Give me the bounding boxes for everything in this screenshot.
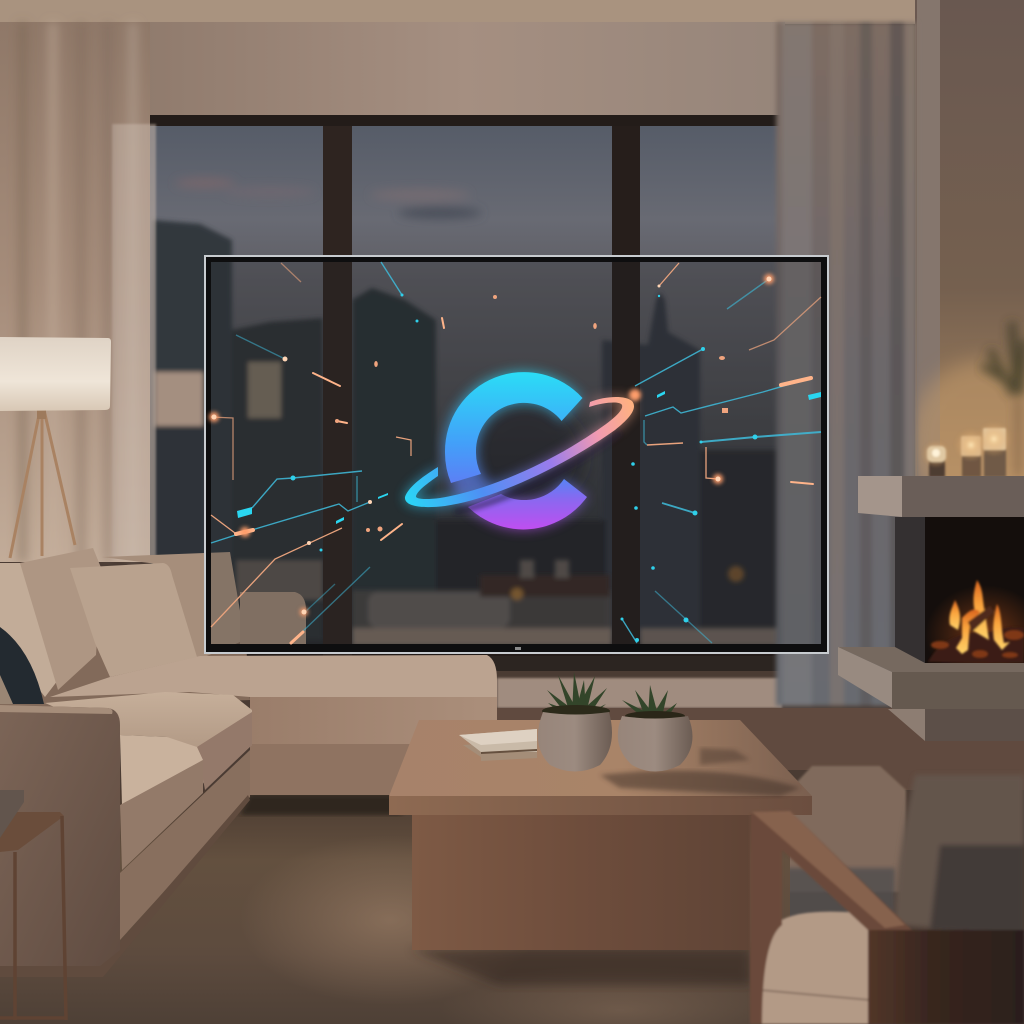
letter C — [445, 372, 582, 483]
coffee table — [389, 720, 812, 950]
plant on mantel — [982, 322, 1024, 476]
books on table — [459, 729, 537, 761]
orbit ring — [405, 397, 634, 507]
candles on mantel — [922, 421, 1012, 477]
cyan circuit lines — [211, 262, 821, 643]
left succulent — [547, 672, 607, 716]
ceiling — [0, 0, 1024, 24]
window reflection of the room — [236, 533, 804, 646]
back cushions — [0, 563, 58, 697]
sectional sofa — [0, 548, 497, 977]
window mullions — [150, 115, 782, 671]
upper seat cushion — [45, 692, 252, 785]
sunset clouds — [175, 178, 482, 219]
throw pillow — [70, 563, 197, 677]
wooden arm — [750, 811, 1024, 1024]
transparent display — [205, 256, 828, 653]
orange circuit lines — [211, 263, 821, 627]
floor: wood and carpet — [0, 708, 1024, 1024]
logo glow — [405, 372, 634, 530]
bezel — [206, 257, 827, 652]
ring shadow — [455, 432, 620, 512]
cyan blocks and dashes — [237, 391, 821, 524]
sofa base — [120, 750, 250, 940]
left pot — [538, 712, 612, 772]
bright orange streaks — [236, 318, 813, 643]
plant pots — [538, 672, 692, 772]
screen tint — [210, 261, 822, 645]
firebox — [895, 517, 1024, 685]
right curtain — [776, 22, 917, 706]
upper wall — [145, 22, 785, 118]
seat cushion — [760, 912, 880, 1024]
chaise top — [50, 655, 497, 697]
particles — [209, 274, 774, 642]
armchair foreground — [750, 775, 1024, 1024]
planet C logo — [405, 372, 634, 530]
right sofa arm seen behind screen — [240, 592, 306, 645]
floor lamp — [0, 337, 111, 558]
fireplace — [838, 322, 1024, 741]
hearth — [838, 647, 1024, 741]
flames — [949, 580, 1010, 654]
window with skyline view — [150, 115, 804, 671]
right wall — [910, 0, 1024, 520]
baseboard under window — [497, 678, 782, 708]
chaise front — [250, 697, 497, 744]
lower seat cushion — [120, 735, 203, 805]
dark pillow — [0, 627, 44, 704]
sofa back base — [0, 620, 250, 710]
skyline buildings — [153, 220, 782, 645]
side table with books — [0, 790, 66, 1020]
right pot — [618, 716, 692, 772]
dark halo around logo — [465, 400, 585, 510]
right succulent — [622, 685, 677, 717]
sofa left arm — [0, 705, 120, 966]
left curtain — [0, 22, 156, 562]
bezel badge — [515, 647, 521, 650]
mantel — [858, 476, 1024, 517]
chair back — [895, 775, 1024, 935]
